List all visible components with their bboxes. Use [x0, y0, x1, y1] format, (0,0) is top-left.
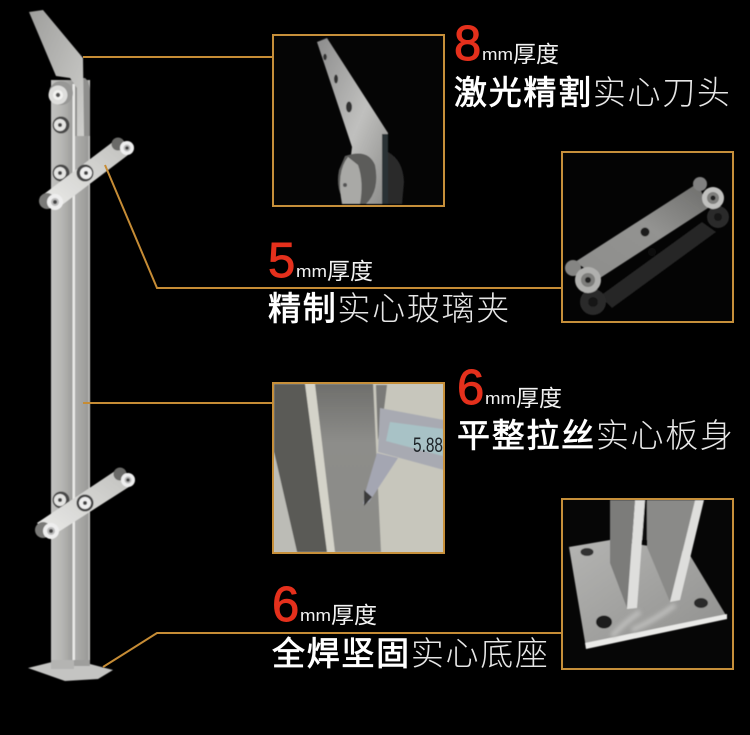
- thickness heading: 6: [457, 361, 484, 415]
- base plate: [28, 662, 113, 681]
- leader lines: [83, 57, 561, 667]
- thickness heading: 厚度: [331, 602, 377, 628]
- thickness heading: 厚度: [327, 258, 373, 284]
- thickness heading: mm: [485, 389, 516, 408]
- thickness heading: mm: [296, 262, 327, 281]
- callout: base 6mm: [272, 578, 550, 672]
- panel: base plate photo: [562, 499, 733, 669]
- panel: glass clamp photo: [562, 152, 733, 322]
- thickness heading: 厚度: [516, 385, 562, 411]
- lower glass clamp: [35, 468, 135, 539]
- upper bolts: [48, 81, 73, 182]
- post body: [51, 78, 90, 668]
- thickness heading: 6: [272, 578, 299, 632]
- thickness heading: 5: [268, 234, 295, 288]
- callout: glass clamp 5mm: [268, 234, 511, 327]
- feature label: 激光精割实心刀头: [454, 74, 732, 111]
- panel: caliper measurement photo: [273, 383, 444, 553]
- lower bolt: [52, 492, 70, 508]
- thickness heading: mm: [482, 45, 513, 64]
- feature label: 全焊坚固实心底座: [272, 635, 550, 672]
- panel: cutter head photo: [273, 35, 444, 206]
- thickness heading: 厚度: [513, 41, 559, 67]
- upper glass clamp: [39, 138, 134, 210]
- top blade: [29, 10, 84, 136]
- feature label: 精制实心玻璃夹: [268, 290, 511, 327]
- feature label: 平整拉丝实心板身: [457, 417, 735, 454]
- railing post product image: [28, 10, 135, 681]
- thickness heading: mm: [300, 606, 331, 625]
- callout: panel body 6mm: [457, 361, 735, 454]
- callout: cutter head 8mm: [454, 17, 732, 111]
- caliper reading: 5.88: [413, 434, 443, 457]
- thickness heading: 8: [454, 17, 481, 71]
